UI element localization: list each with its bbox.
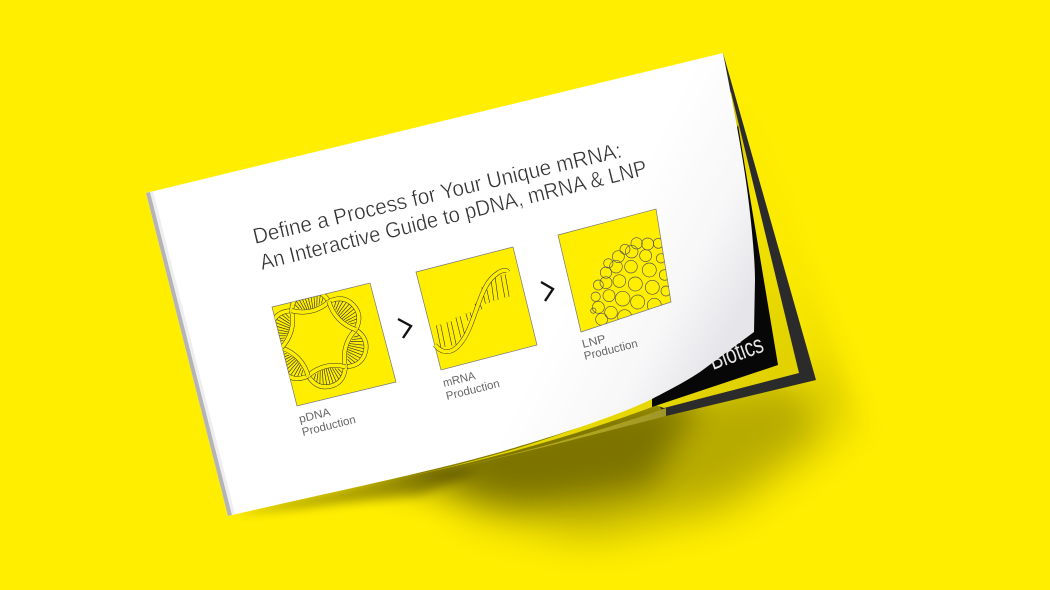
- label: LNP Production: Production: [583, 338, 639, 363]
- title: Define a Process for Your Unique mRNA:: [250, 138, 624, 249]
- panel: mRNA: [416, 247, 537, 403]
- black inner page: [640, 125, 778, 407]
- cover wordmark fragment: Biotics: [705, 330, 767, 375]
- back cover dark sheet: [655, 53, 816, 416]
- icon: plasmid DNA ring: [274, 294, 368, 390]
- icon: lipid nanoparticle: [591, 238, 671, 325]
- spine: [146, 191, 235, 516]
- label: LNP Production: LNP: [581, 333, 607, 351]
- title: An Interactive Guide to pDNA, mRNA & LNP: [257, 155, 650, 275]
- yellow inner sheet: [640, 92, 799, 408]
- panel: LNP: [558, 209, 671, 363]
- icon: mRNA strand: [435, 270, 508, 352]
- panel: pDNA: [272, 282, 396, 436]
- drop shadows: [232, 60, 865, 535]
- arrow: pDNA to mRNA: [398, 319, 411, 338]
- label: pDNA Production: pDNA: [298, 406, 332, 426]
- front cover white page: [146, 53, 755, 516]
- label: pDNA Production: Production: [301, 414, 357, 439]
- brochure scene: [146, 53, 860, 556]
- arrow: mRNA to LNP: [541, 282, 553, 301]
- bottom edge page slivers: [400, 396, 666, 479]
- label: mRNA Production: mRNA: [442, 370, 477, 390]
- label: mRNA Production: Production: [445, 378, 501, 403]
